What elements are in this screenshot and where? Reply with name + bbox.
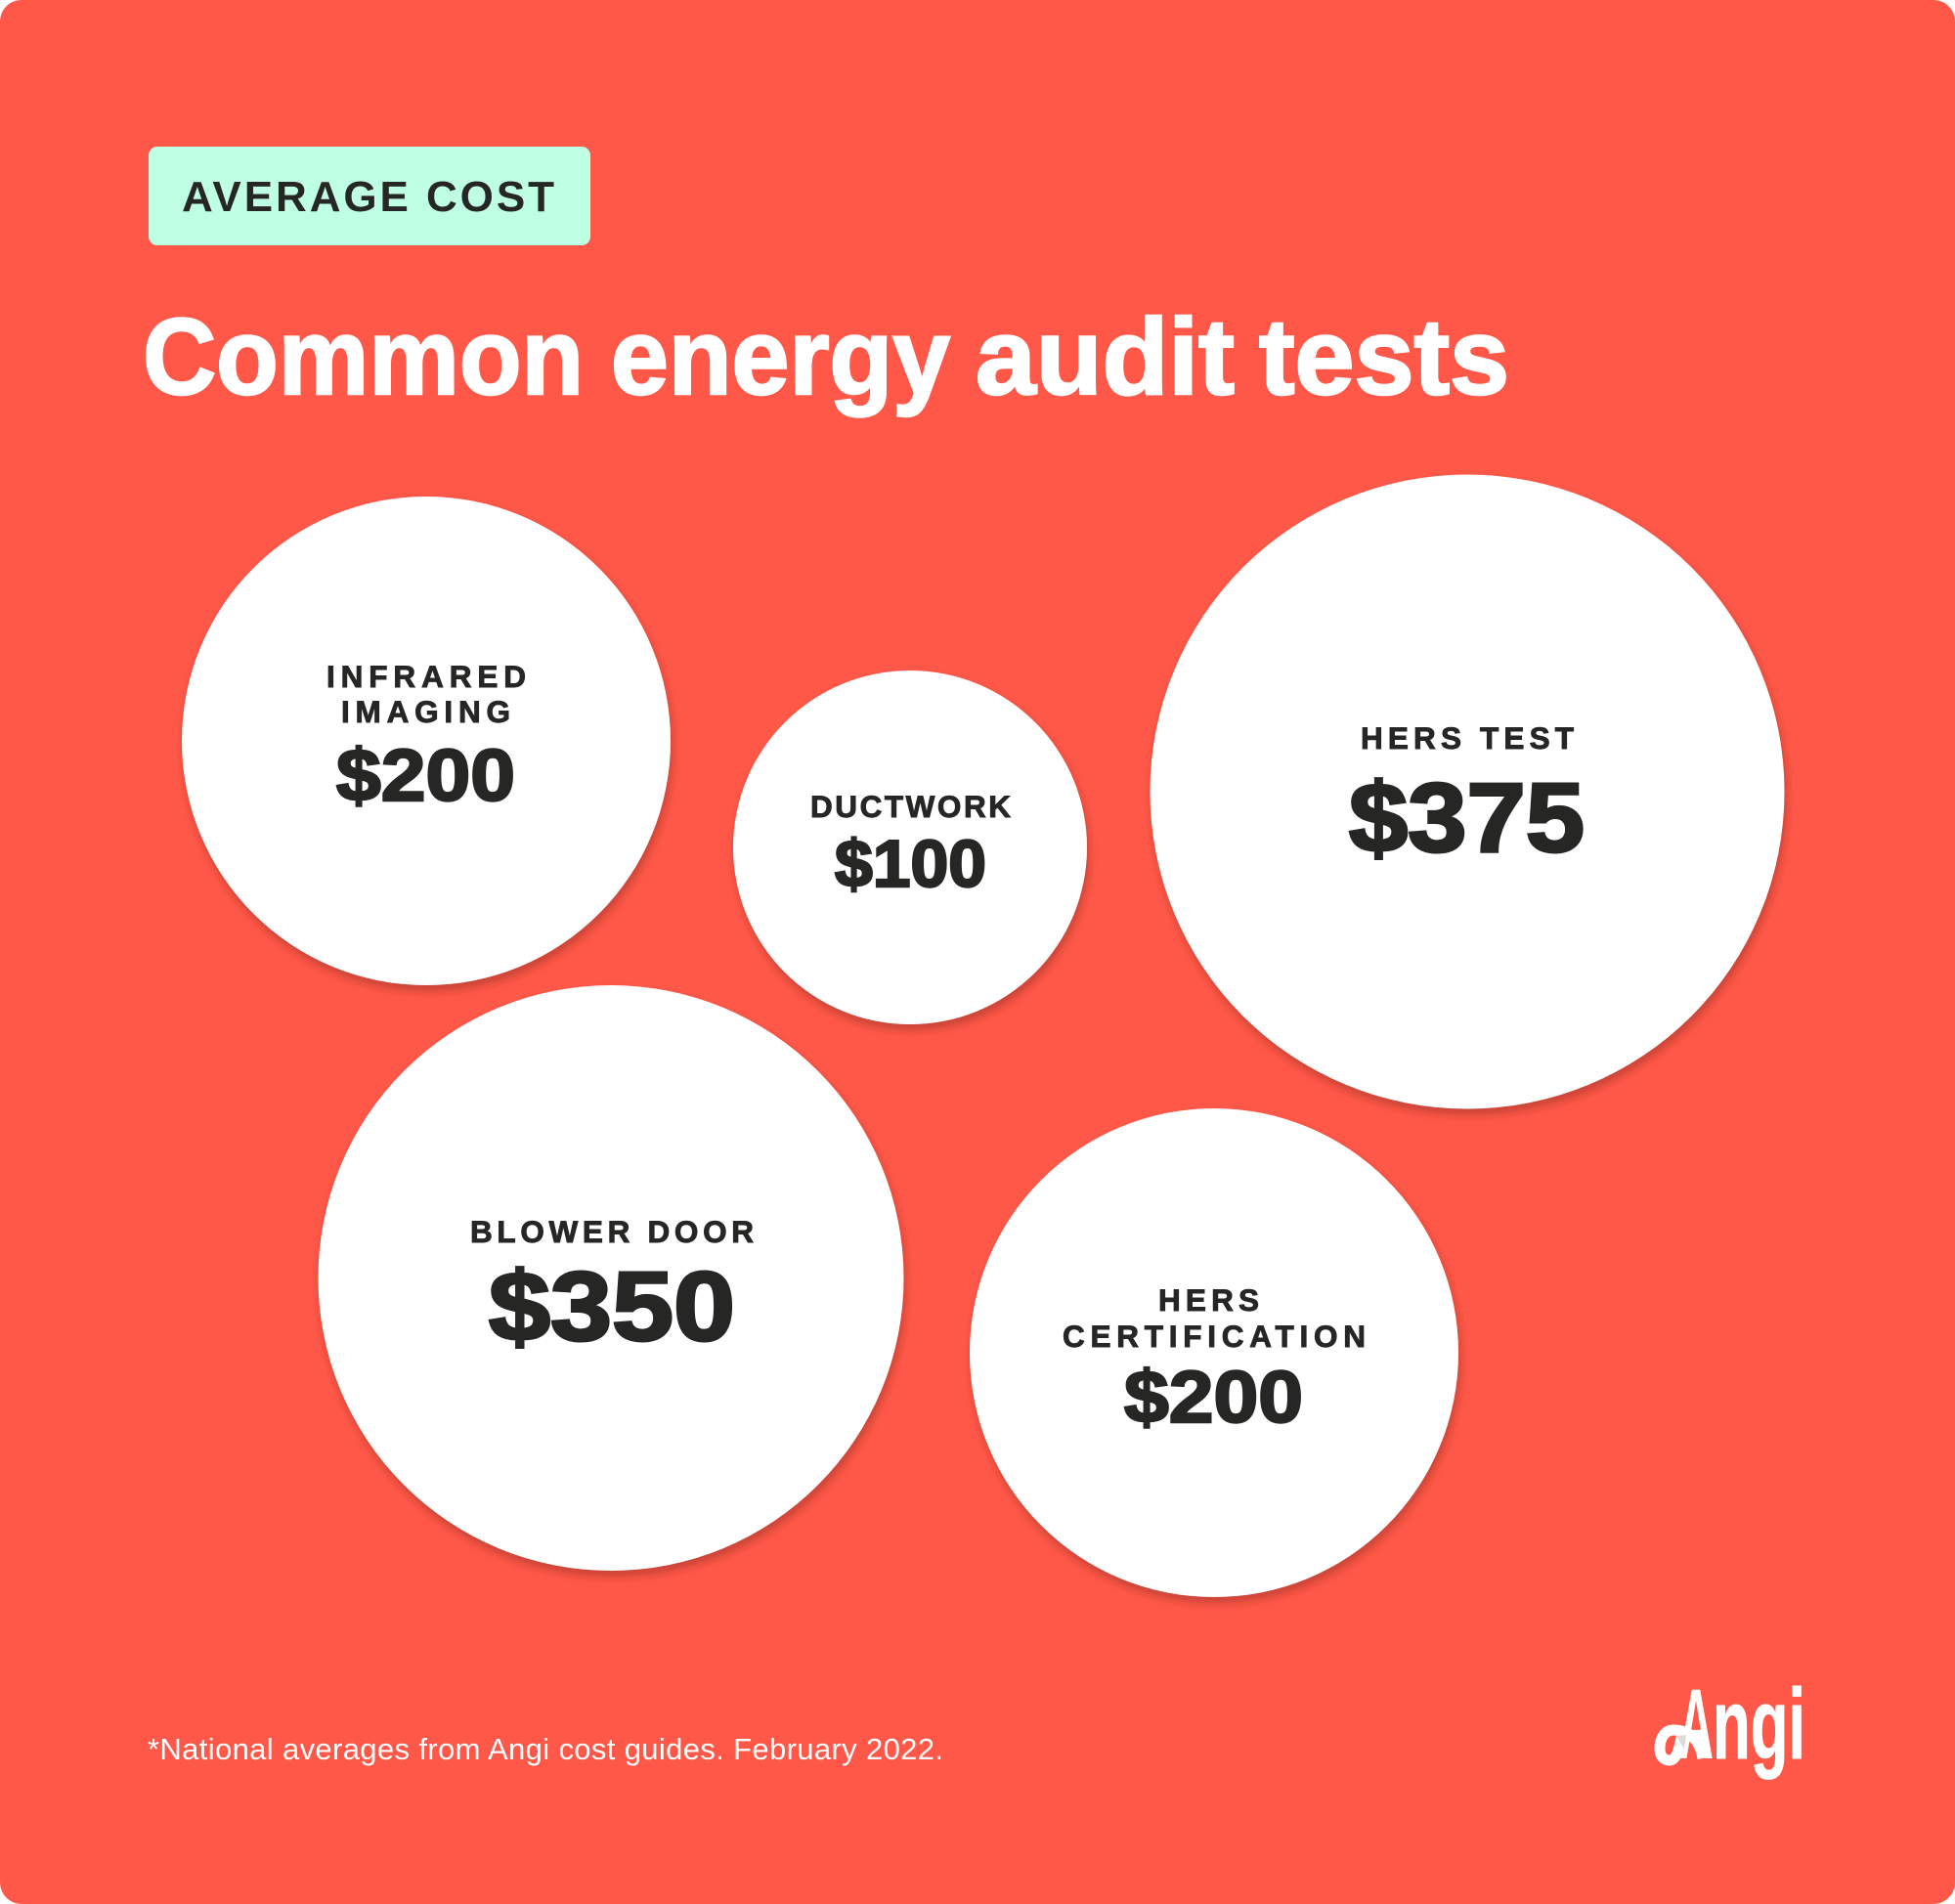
bubble: infrared imaging [182, 497, 671, 985]
title: audit [976, 297, 1235, 417]
title: Common [143, 297, 584, 417]
bubble: hers certification: $200 [1124, 1356, 1303, 1438]
bubble: hers test: HERS TEST [1361, 720, 1574, 756]
title: energy [611, 297, 950, 417]
footnote: *National averages from Angi cost guides. February 2022. [148, 1732, 943, 1766]
bubble: hers test: $375 [1349, 763, 1585, 873]
bubble: hers certification: CERTIFICATION [1063, 1319, 1366, 1354]
bubble: blower door: $350 [489, 1252, 735, 1362]
bubble: ductwork [733, 671, 1087, 1024]
title: tests [1259, 297, 1509, 417]
logo: Angi: ngi [1713, 1668, 1805, 1780]
bubble: ductwork: $100 [835, 827, 986, 901]
badge: average cost [149, 147, 590, 245]
logo: Angi [1660, 1668, 1805, 1780]
bubble: hers test [1150, 475, 1785, 1108]
bubble: infrared imaging: INFRARED [326, 659, 526, 694]
bubble: hers certification: HERS [1158, 1282, 1259, 1318]
title [143, 297, 1509, 417]
bubble: blower door: BLOWER DOOR [470, 1214, 754, 1249]
bubble: infrared imaging: $200 [336, 734, 515, 816]
bubble: infrared imaging: IMAGING [341, 694, 510, 729]
logo: Angi: A [1678, 1668, 1714, 1780]
bubble: hers certification [970, 1108, 1458, 1597]
bubble: blower door [319, 985, 903, 1571]
badge: average cost: AVERAGE COST [182, 173, 554, 221]
bubble: ductwork: DUCTWORK [810, 789, 1011, 824]
